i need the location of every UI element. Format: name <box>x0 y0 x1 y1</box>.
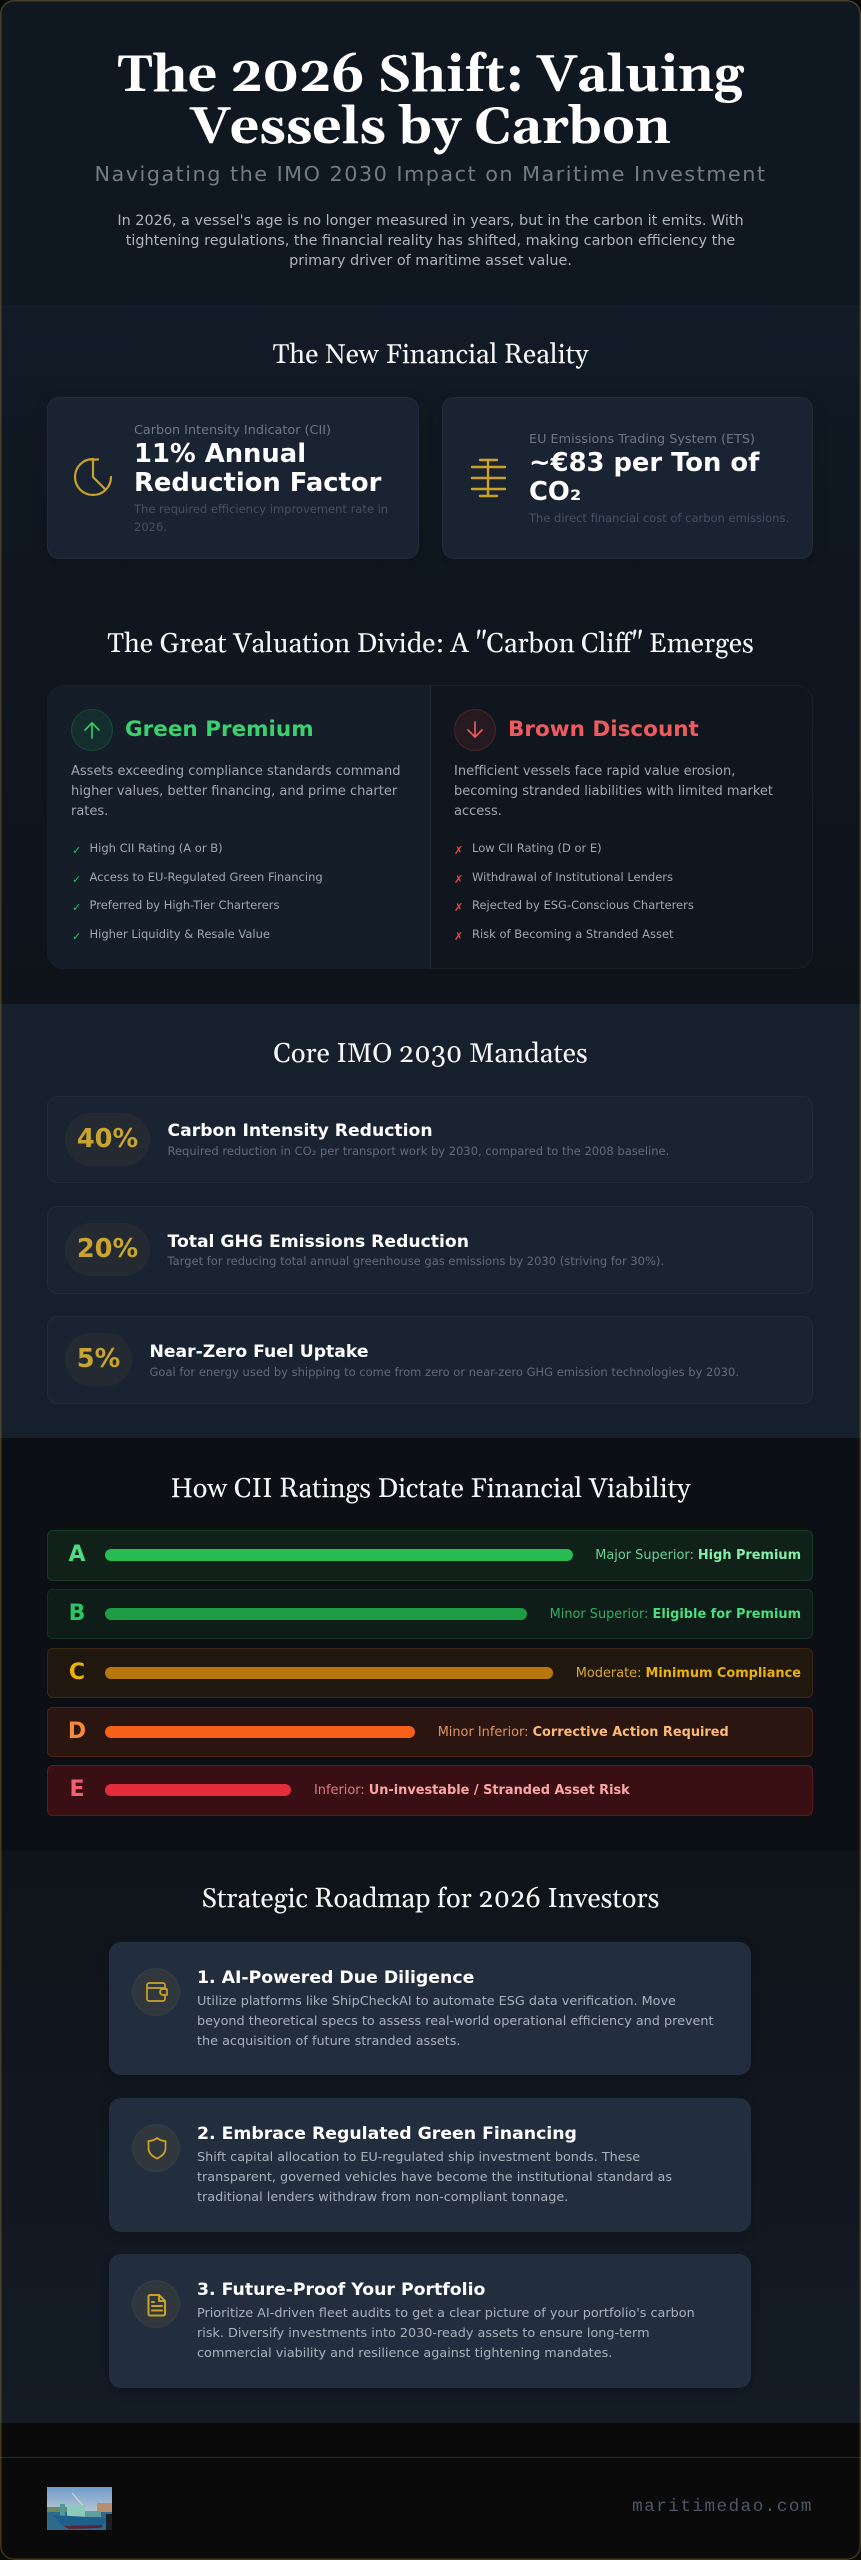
step text: the acquisition of future stranded assets. <box>197 2034 460 2049</box>
description: 2026. <box>134 520 167 534</box>
check mark: ✓ <box>72 844 81 857</box>
icon: shield <box>132 2124 180 2172</box>
rating row B <box>47 1589 813 1639</box>
label: Minor Superior: Eligible for Premium <box>550 1606 801 1622</box>
panel: brown discount <box>454 709 773 943</box>
intro text: tightening regulations, the financial reality has shifted, making carbon efficiency the <box>126 233 735 249</box>
list item: Rejected by ESG-Conscious Charterers <box>472 898 694 912</box>
step text <box>197 2150 672 2205</box>
title: The 2026 Shift: Valuing <box>117 42 744 108</box>
text <box>71 764 400 819</box>
rating row C <box>47 1648 813 1698</box>
heading: roadmap: Strategic Roadmap for 2026 Investors <box>202 1883 659 1917</box>
section: roadmap <box>0 1851 861 2423</box>
panel: CII card <box>47 397 419 559</box>
step title: 3. Future-Proof Your Portfolio <box>197 2280 485 2300</box>
panel: step 2 <box>109 2098 751 2232</box>
bar <box>105 1549 573 1561</box>
value: CO₂ <box>529 477 581 507</box>
description: The required efficiency improvement rate in <box>134 502 388 516</box>
icon: document <box>132 2280 180 2328</box>
heading: new financial reality: The New Financial Reality <box>273 338 588 372</box>
step title: 1. AI-Powered Due Diligence <box>197 1968 474 1988</box>
image: vessel photo <box>47 2487 112 2530</box>
list item: Preferred by High-Tier Charterers <box>90 898 280 912</box>
value: Reduction Factor <box>134 468 381 498</box>
website: maritimedao.com <box>632 2497 813 2517</box>
label: Inferior: Un-investable / Stranded Asset Risk <box>314 1782 630 1798</box>
mandate title: Carbon Intensity Reduction <box>168 1121 433 1141</box>
icon: down arrow <box>454 709 496 751</box>
intro text: In 2026, a vessel's age is no longer measured in years, but in the carbon it emits. With <box>117 213 744 229</box>
step text: Shift capital allocation to EU-regulated ship investment bonds. These <box>197 2150 640 2165</box>
icon: wallet <box>132 1968 180 2016</box>
heading: mandates: Core IMO 2030 Mandates <box>273 1038 588 1072</box>
step text: traditional lenders withdraw from non-compliant tonnage. <box>197 2190 568 2205</box>
letter: D <box>68 1719 86 1744</box>
stat pill <box>65 1333 132 1386</box>
heading: Green Premium <box>125 717 314 742</box>
stat pill: 5% <box>77 1344 120 1374</box>
label: Major Superior: High Premium <box>595 1548 801 1562</box>
icon: stacked bars <box>470 458 506 498</box>
rating row E <box>47 1765 813 1816</box>
value <box>134 439 382 498</box>
step title: 2. Embrace Regulated Green Financing <box>197 2124 577 2144</box>
footer <box>0 2423 861 2560</box>
list item: Low CII Rating (D or E) <box>472 841 602 855</box>
mandate description: Required reduction in CO₂ per transport work by 2030, compared to the 2008 baseline. <box>168 1144 669 1158</box>
list item: Higher Liquidity & Resale Value <box>90 927 270 941</box>
bar <box>105 1608 527 1620</box>
step text: beyond theoretical specs to assess real-world operational efficiency and prevent <box>197 2014 714 2029</box>
cross mark: ✗ <box>454 901 463 914</box>
rating row D <box>47 1707 813 1757</box>
panel: step 1 <box>109 1942 751 2075</box>
list item: High CII Rating (A or B) <box>90 841 223 855</box>
heading: valuation divide: The Great Valuation Divide: A "Carbon Cliff" Emerges <box>107 628 754 662</box>
cross mark: ✗ <box>454 873 463 886</box>
title: Vessels by Carbon <box>190 94 671 160</box>
list item: Risk of Becoming a Stranded Asset <box>472 927 674 941</box>
section: financial reality and valuation divide <box>0 305 861 1004</box>
heading: CII: How CII Ratings Dictate Financial Viability <box>171 1472 690 1506</box>
step text <box>197 1994 714 2049</box>
text <box>454 764 773 819</box>
text: rates. <box>71 804 108 819</box>
panel: mandate 5% <box>47 1316 813 1404</box>
text: becoming stranded liabilities with limited market <box>454 784 773 799</box>
panel: step 3 <box>109 2254 751 2388</box>
step text: commercial viability and resilience against tightening mandates. <box>197 2346 612 2361</box>
bar <box>105 1667 553 1679</box>
title <box>117 42 744 160</box>
label: EU Emissions Trading System (ETS) <box>529 432 755 447</box>
footer divider <box>0 2457 861 2458</box>
subtitle: Navigating the IMO 2030 Impact on Maritime Investment <box>95 162 766 186</box>
stat pill: 40% <box>77 1124 138 1154</box>
label: Carbon Intensity Indicator (CII) <box>134 423 331 438</box>
mandate title: Total GHG Emissions Reduction <box>168 1232 469 1252</box>
text: Inefficient vessels face rapid value erosion, <box>454 764 735 779</box>
rating row A <box>47 1530 813 1581</box>
value <box>529 448 760 507</box>
panel: mandate 40% <box>47 1096 813 1183</box>
list item: Withdrawal of Institutional Lenders <box>472 870 673 884</box>
step text: transparent, governed vehicles have become the institutional standard as <box>197 2170 672 2185</box>
stat pill <box>65 1113 150 1166</box>
value: 11% Annual <box>134 439 306 469</box>
value: ~€83 per Ton of <box>529 448 759 478</box>
text: access. <box>454 804 502 819</box>
cross mark: ✗ <box>454 844 463 857</box>
intro text: primary driver of maritime asset value. <box>289 253 572 269</box>
step text: Prioritize AI-driven fleet audits to get a clear picture of your portfolio's carbon <box>197 2306 695 2321</box>
bar <box>105 1784 291 1796</box>
panel: ETS card <box>442 397 813 559</box>
cross mark: ✗ <box>454 930 463 943</box>
letter: C <box>69 1660 85 1685</box>
mandate description: Goal for energy used by shipping to come from zero or near-zero GHG emission technologies by 2030. <box>150 1365 739 1379</box>
check mark: ✓ <box>72 930 81 943</box>
description <box>134 502 388 534</box>
icon: pie clock <box>74 458 112 496</box>
letter: E <box>69 1777 85 1802</box>
label: Minor Inferior: Corrective Action Required <box>438 1724 729 1740</box>
step text <box>197 2306 695 2361</box>
section: CII ratings <box>0 1438 861 1851</box>
step text: risk. Diversify investments into 2030-ready assets to ensure long-term <box>197 2326 650 2341</box>
heading: Brown Discount <box>508 717 699 742</box>
panel: valuation divide <box>47 685 813 969</box>
step text: Utilize platforms like ShipCheckAI to automate ESG data verification. Move <box>197 1994 676 2009</box>
description: The direct financial cost of carbon emissions. <box>529 511 789 525</box>
list item: Access to EU-Regulated Green Financing <box>90 870 323 884</box>
section: core mandates <box>0 1004 861 1438</box>
label: Moderate: Minimum Compliance <box>576 1666 801 1680</box>
panel: green premium <box>47 685 431 969</box>
section: header <box>0 0 861 305</box>
check mark: ✓ <box>72 873 81 886</box>
check mark: ✓ <box>72 901 81 914</box>
mandate description: Target for reducing total annual greenhouse gas emissions by 2030 (striving for 30%). <box>168 1254 664 1268</box>
text: Assets exceeding compliance standards command <box>71 764 400 779</box>
stat pill: 20% <box>77 1234 138 1264</box>
icon: up arrow <box>71 709 113 751</box>
stat pill <box>65 1223 150 1276</box>
letter: B <box>69 1601 85 1626</box>
text: higher values, better financing, and prime charter <box>71 784 397 799</box>
panel: mandate 20% <box>47 1206 813 1294</box>
bar <box>105 1726 415 1738</box>
intro text <box>117 213 744 269</box>
mandate title: Near-Zero Fuel Uptake <box>150 1342 368 1362</box>
letter: A <box>68 1542 86 1567</box>
